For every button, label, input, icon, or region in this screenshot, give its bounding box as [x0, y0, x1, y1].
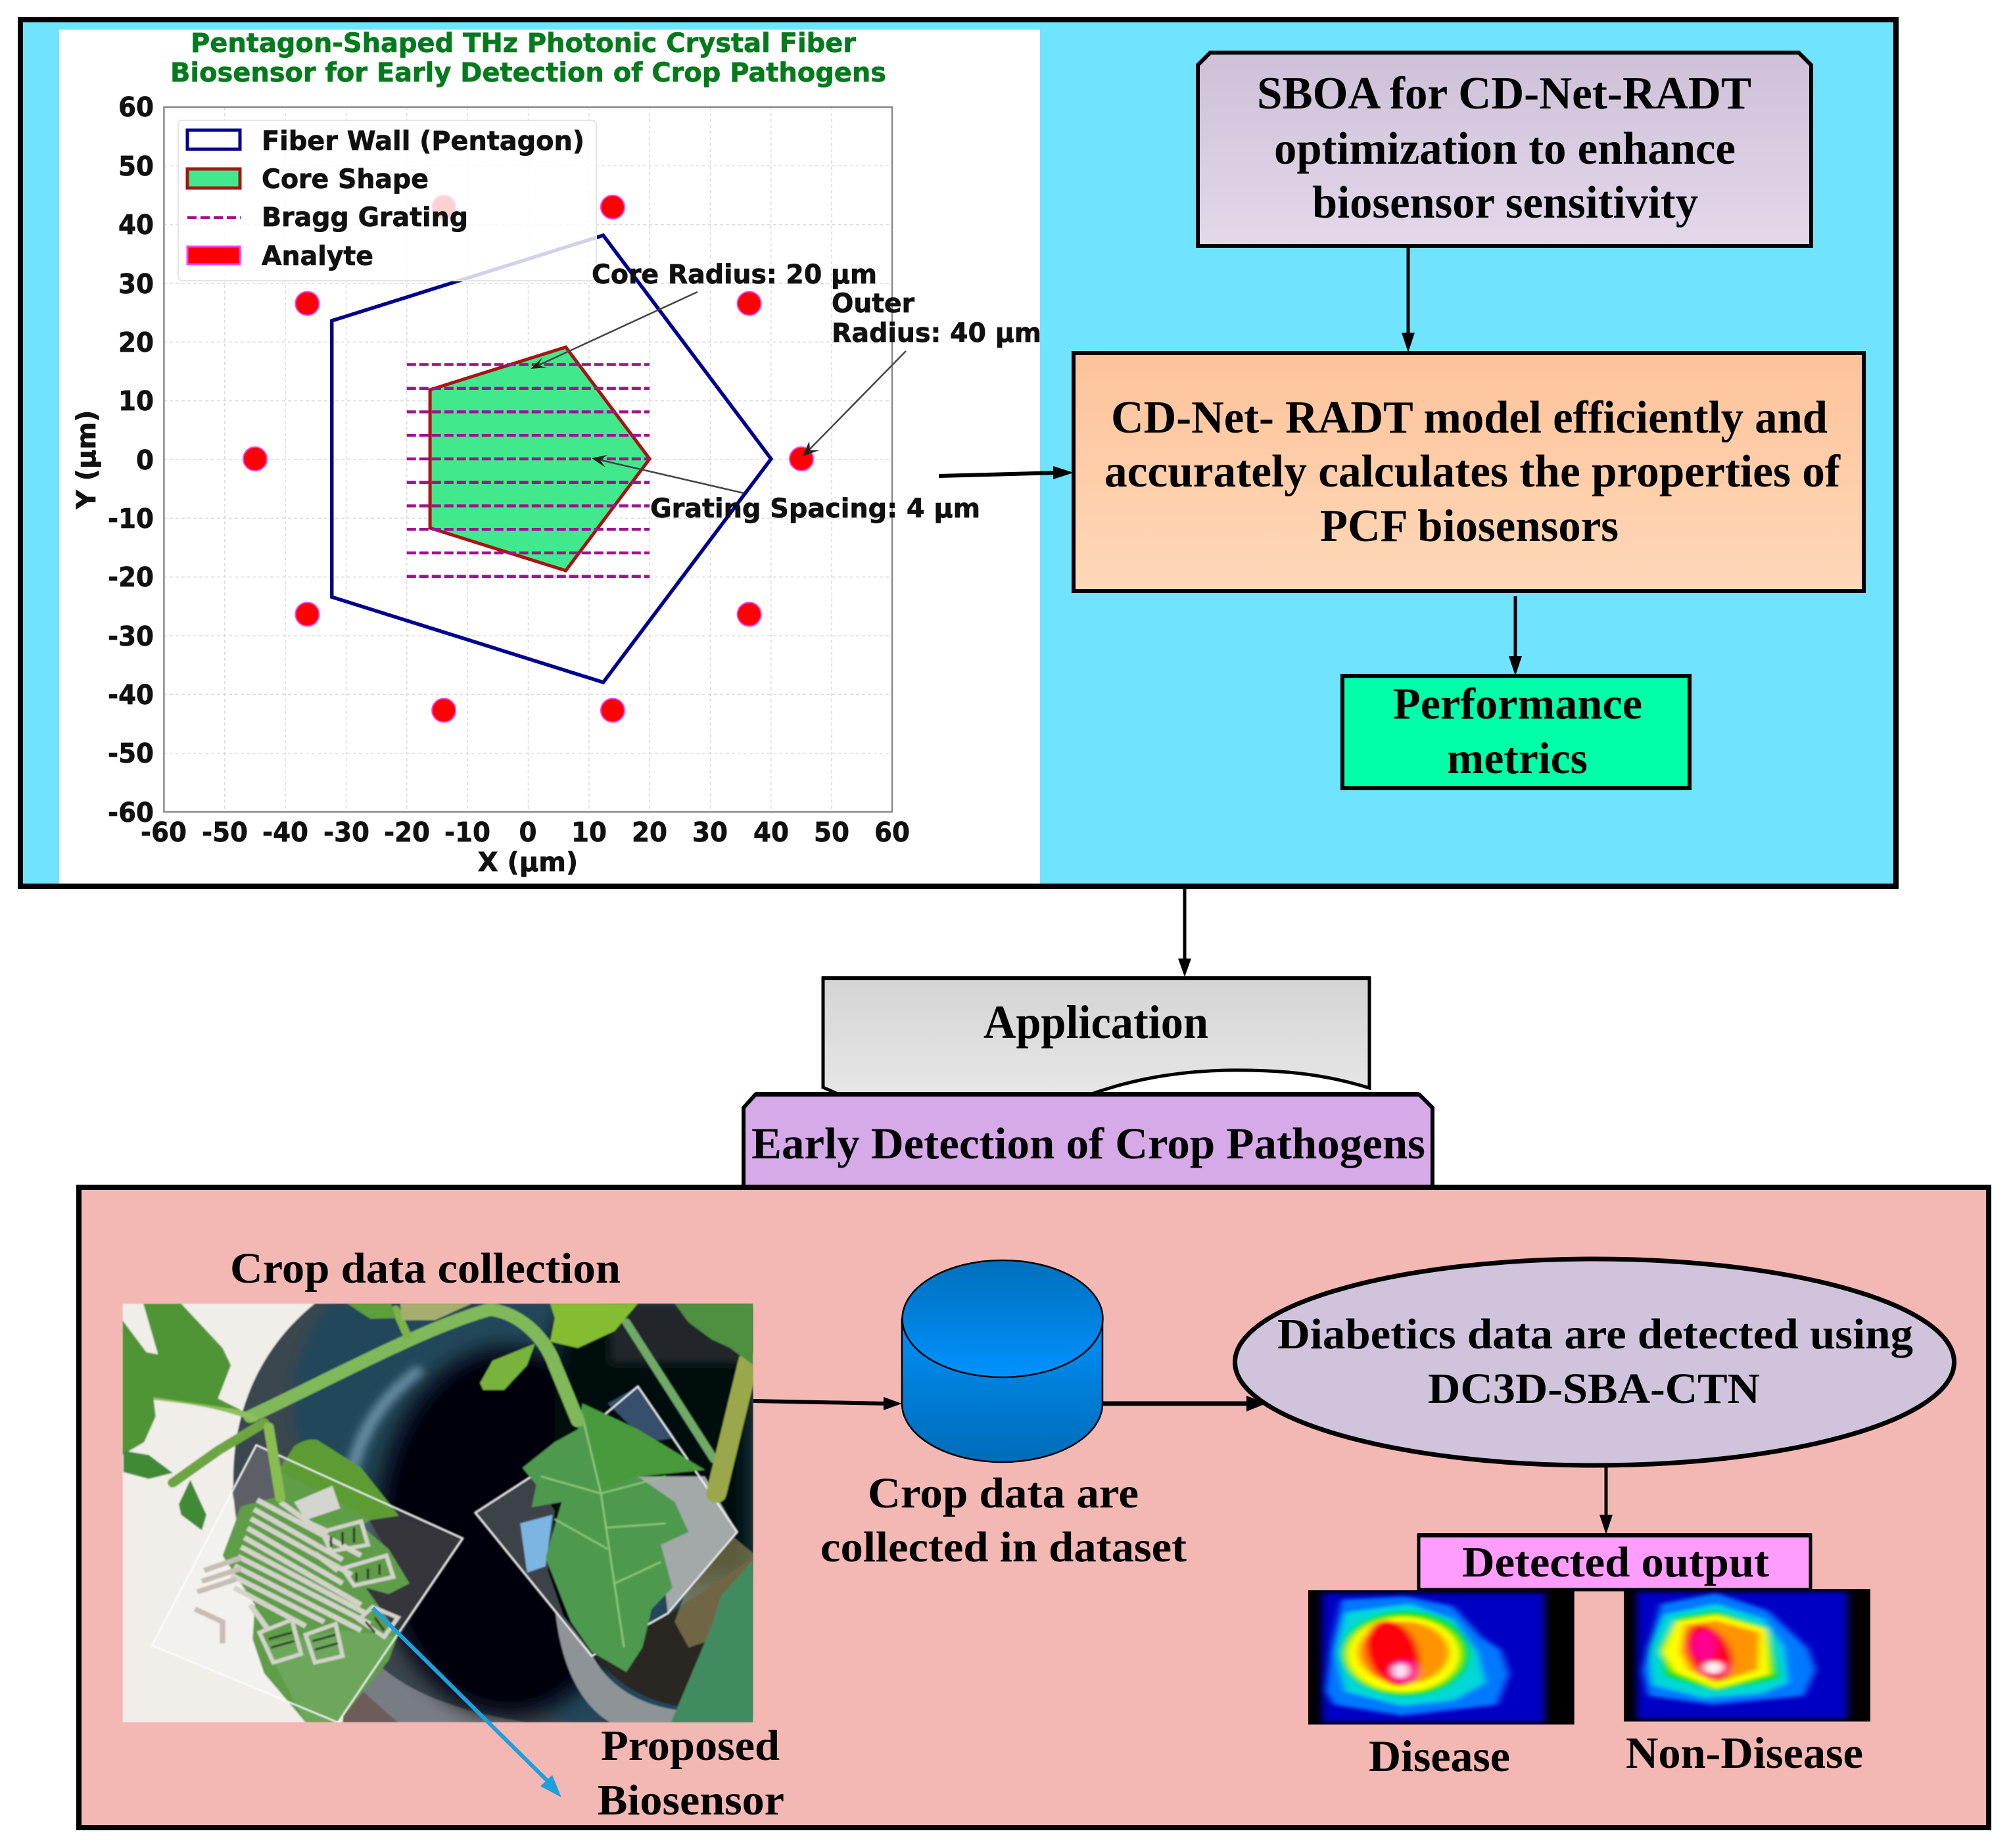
- analyte holes: [243, 195, 813, 722]
- annotation: grating spacing: [592, 455, 980, 524]
- x axis tick labels: -30: [323, 817, 369, 848]
- box: performance metrics: metrics: [1447, 733, 1588, 783]
- box: application document shape: [822, 976, 1371, 1104]
- annotation: outer radius: [803, 289, 1041, 456]
- y axis tick labels: 30: [118, 268, 154, 300]
- y axis tick labels: -50: [108, 738, 154, 769]
- y axis tick labels: -10: [108, 503, 154, 534]
- photo: biosensor on tomato leaves: [122, 1304, 753, 1722]
- right leaf: [523, 1404, 705, 1672]
- ellipse: DC3D-SBA-CTN detection: Diabetics data are detected using: [1277, 1310, 1913, 1358]
- box: SBOA optimization: SBOA for CD-Net-RADT: [1257, 68, 1751, 119]
- electrode traces: [195, 1500, 398, 1663]
- x axis tick labels: 0: [519, 817, 536, 848]
- annotation: core radius: Core Radius: 20 µm: [592, 260, 877, 290]
- box: detected output: Detected output: [1462, 1538, 1769, 1586]
- box: SBOA optimization: [1198, 53, 1811, 246]
- tomato stems: [135, 1310, 749, 1498]
- label: proposed biosensor: [598, 1722, 784, 1824]
- legend: [178, 120, 596, 281]
- fiber wall pentagon: [332, 235, 771, 682]
- y axis tick labels: 0: [136, 444, 154, 476]
- legend: Core Shape: [262, 164, 429, 195]
- core pentagon: [430, 347, 650, 571]
- label: non-disease: Non-Disease: [1626, 1728, 1863, 1778]
- box: early detection of crop pathogens: Early Detection of Crop Pathogens: [751, 1118, 1425, 1168]
- left leaf glass outline: [152, 1445, 463, 1722]
- label: crop data are collected in dataset: [820, 1469, 1187, 1571]
- heatmap: disease: [1308, 1590, 1575, 1724]
- box: CD-Net-RADT model: accurately calculates the properties of: [1104, 446, 1841, 497]
- y axis tick labels: -20: [108, 561, 154, 593]
- heatmap: non-disease: [1624, 1589, 1870, 1722]
- arrow: panel to application: [1178, 888, 1191, 977]
- legend: Bragg Grating: [262, 202, 468, 233]
- box: CD-Net-RADT model: PCF biosensors: [1320, 501, 1619, 552]
- x axis tick labels: [141, 817, 910, 848]
- ellipse: DC3D-SBA-CTN detection: [1235, 1259, 1954, 1465]
- upper left leaf: [122, 1304, 241, 1455]
- annotation: grating spacing: Grating Spacing: 4 µm: [650, 494, 980, 524]
- arrow: model to metrics: [1509, 596, 1522, 676]
- y axis tick labels: 40: [118, 209, 154, 241]
- arrow: chart to model box: [939, 466, 1074, 479]
- box: CD-Net-RADT model: CD-Net- RADT model efficiently and: [1111, 392, 1828, 443]
- box: SBOA optimization: optimization to enhance: [1274, 124, 1736, 174]
- label: crop data are collected in dataset: Crop data are: [868, 1469, 1139, 1517]
- legend: Analyte: [262, 241, 373, 272]
- x axis tick labels: 60: [874, 817, 910, 848]
- x axis tick labels: -60: [141, 817, 187, 848]
- annotation: core radius: [531, 260, 877, 369]
- box: application document shape: Application: [983, 996, 1208, 1049]
- right glass substrate: [475, 1386, 737, 1656]
- chart title: [170, 28, 886, 88]
- box: SBOA optimization: biosensor sensitivity: [1312, 178, 1698, 228]
- label: disease: Disease: [1369, 1731, 1510, 1781]
- left glass substrate: [231, 1446, 460, 1634]
- y axis tick labels: [108, 91, 154, 828]
- x axis tick labels: -40: [262, 817, 308, 848]
- arrow: proposed biosensor pointer: [373, 1608, 561, 1797]
- x axis tick labels: 10: [571, 817, 607, 848]
- box: performance metrics: [1342, 676, 1690, 788]
- label: crop data are collected in dataset: collected in dataset: [820, 1523, 1187, 1571]
- icon: dataset cylinder: [902, 1260, 1103, 1462]
- annotation: outer radius: Outer: [832, 289, 914, 319]
- x axis tick labels: 30: [692, 817, 728, 848]
- panel: crop data workflow: [79, 1187, 1989, 1828]
- x axis tick labels: -10: [444, 817, 490, 848]
- x axis tick labels: 50: [814, 817, 849, 848]
- legend: Fiber Wall (Pentagon): [262, 126, 584, 156]
- label: proposed biosensor: Biosensor: [598, 1776, 784, 1824]
- arrow: photo to dataset: [753, 1397, 902, 1410]
- small leaves: [124, 1304, 753, 1722]
- x axis tick labels: -20: [384, 817, 430, 848]
- label: proposed biosensor: Proposed: [601, 1722, 780, 1770]
- left leaf: [223, 1440, 410, 1722]
- y axis tick labels: 60: [118, 91, 154, 123]
- y axis tick labels: 10: [118, 385, 154, 417]
- box: performance metrics: Performance: [1393, 678, 1642, 728]
- chart title: Pentagon-Shaped THz Photonic Crystal Fiber: [191, 28, 856, 59]
- annotation: outer radius: Radius: 40 µm: [832, 318, 1041, 348]
- box: detected output: [1417, 1533, 1812, 1590]
- chart title: Biosensor for Early Detection of Crop Pathogens: [170, 58, 886, 88]
- x axis tick labels: 20: [632, 817, 667, 848]
- y axis tick labels: -30: [108, 621, 154, 652]
- panel: biosensor design and model: [20, 20, 1896, 886]
- heading: crop data collection: Crop data collection: [230, 1244, 621, 1292]
- chart: pentagon PCF cross-section: [59, 28, 1041, 884]
- box: early detection of crop pathogens: [744, 1092, 1433, 1187]
- x axis tick labels: -50: [202, 817, 248, 848]
- y axis tick labels: -60: [108, 797, 154, 828]
- x axis tick labels: 40: [753, 817, 789, 848]
- y axis tick labels: -40: [108, 679, 154, 711]
- arrow: classifier to detected output: [1599, 1467, 1613, 1534]
- arrow: SBOA to model: [1402, 247, 1415, 352]
- ellipse: DC3D-SBA-CTN detection: DC3D-SBA-CTN: [1428, 1365, 1760, 1413]
- box: CD-Net-RADT model: [1074, 353, 1864, 591]
- y axis title: Y (µm): [72, 410, 102, 509]
- electrode contact pad: [294, 1486, 341, 1520]
- x axis title: X (µm): [478, 847, 578, 878]
- y axis tick labels: 50: [118, 151, 154, 182]
- Bragg grating lines: [407, 364, 650, 577]
- arrow: dataset to classifier: [1102, 1396, 1266, 1411]
- y axis tick labels: 20: [118, 327, 154, 358]
